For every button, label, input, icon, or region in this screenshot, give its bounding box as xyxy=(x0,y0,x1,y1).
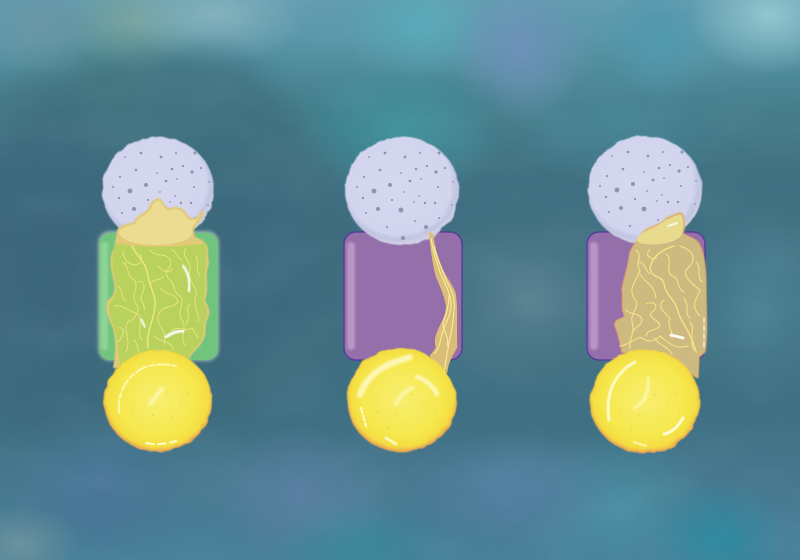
lipid blob: green-tinted fusion pore xyxy=(106,198,209,368)
diagram 3: purple membrane with wide lipid sheet xyxy=(587,136,707,454)
lipid sheet: tan lipid blob xyxy=(615,213,707,378)
membrane: green rectangle xyxy=(98,231,219,361)
diagram 1: green membrane xyxy=(98,137,219,452)
veins xyxy=(114,246,200,356)
highlights xyxy=(668,223,704,348)
lipid channel: thin strand xyxy=(429,232,457,378)
vesicle: grey donor circle xyxy=(588,136,702,244)
vesicle: grey donor circle xyxy=(345,137,459,245)
vesicle: grey donor circle xyxy=(102,137,214,243)
vesicle: yellow acceptor circle xyxy=(590,350,700,454)
diagram 2: purple membrane with thin channel xyxy=(344,137,462,452)
membrane: purple rectangle xyxy=(587,232,705,360)
vesicle: yellow acceptor circle xyxy=(104,350,212,452)
vesicle: yellow acceptor circle xyxy=(347,348,457,452)
highlights xyxy=(141,266,189,337)
membrane: purple rectangle xyxy=(344,232,462,360)
veins xyxy=(620,246,702,354)
